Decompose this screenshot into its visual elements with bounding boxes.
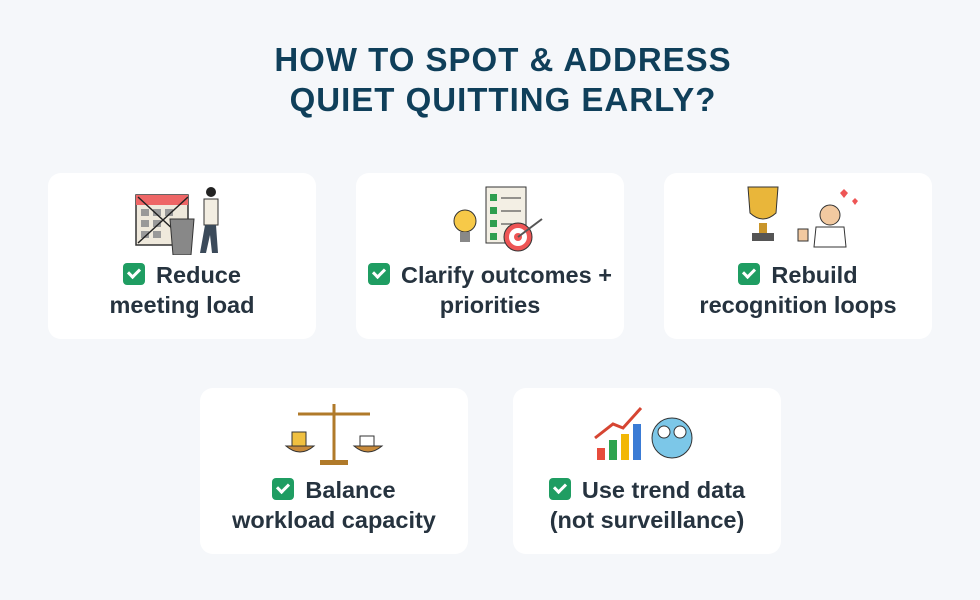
text: priorities xyxy=(440,292,540,318)
title xyxy=(274,41,732,118)
panel: balance workload xyxy=(200,388,468,554)
title: HOW TO SPOT & ADDRESS xyxy=(274,41,732,78)
icon: calendar and trash xyxy=(135,187,218,255)
text: Clarify outcomes + xyxy=(401,262,612,288)
title: QUIET QUITTING EARLY? xyxy=(290,81,716,118)
icon: bulb checklist target xyxy=(454,186,542,252)
panel: reduce meeting load xyxy=(48,173,316,339)
panel: trend data xyxy=(513,388,781,554)
text xyxy=(368,262,612,318)
text: (not surveillance) xyxy=(550,507,744,533)
text: recognition loops xyxy=(699,292,897,318)
text: meeting load xyxy=(110,292,254,318)
text xyxy=(110,262,254,318)
text: Use trend data xyxy=(582,477,745,503)
text: workload capacity xyxy=(232,507,436,533)
text: Reduce xyxy=(156,262,241,288)
icon: trophy and person xyxy=(747,186,858,248)
icon: scale xyxy=(284,404,384,465)
panel: rebuild recognition xyxy=(664,173,932,339)
text xyxy=(699,262,897,318)
icon: chart and owl xyxy=(594,407,692,460)
text xyxy=(549,477,746,533)
text xyxy=(232,477,436,533)
text: Balance xyxy=(305,477,396,503)
panel: clarify outcomes xyxy=(356,173,624,339)
text: Rebuild xyxy=(771,262,858,288)
